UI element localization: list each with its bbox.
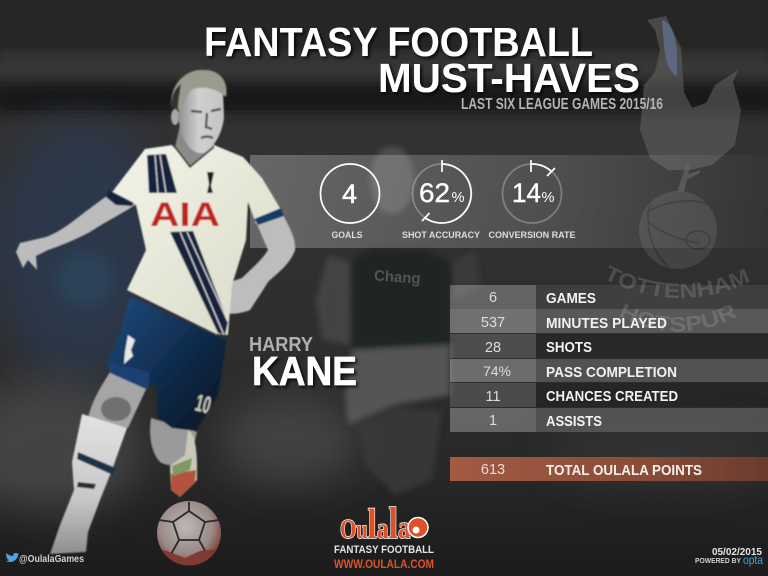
football <box>157 501 221 566</box>
player name <box>249 333 357 394</box>
left arm <box>16 192 135 270</box>
row: games: GAMES <box>546 291 596 307</box>
neck <box>175 125 215 167</box>
row: minutes played <box>450 309 768 333</box>
row: pass completion: PASS COMPLETION <box>546 365 677 381</box>
row: total oulala points: TOTAL OULALA POINTS <box>546 463 702 479</box>
row: chances created: 11 <box>485 389 501 405</box>
row: chances created <box>450 383 768 407</box>
player figure <box>16 70 295 554</box>
stat: goals: 4 <box>342 179 357 209</box>
stat: shot accuracy: SHOT ACCURACY <box>402 230 481 241</box>
ghost shirt sponsor text: Chang <box>373 267 421 288</box>
website url: WWW.OULALA.COM <box>334 559 434 571</box>
row: minutes played: 537 <box>481 315 505 331</box>
stat: shot accuracy <box>402 160 481 241</box>
stat: goals <box>320 164 380 241</box>
sleeve cuffs <box>106 190 134 206</box>
ghost arms <box>316 255 350 345</box>
ghost shorts <box>345 345 450 425</box>
hair shadow <box>171 84 181 110</box>
row: assists <box>450 408 768 432</box>
ghost legs <box>358 408 442 495</box>
date and credit: 05/02/2015 <box>712 547 762 558</box>
title: MUST-HAVES <box>378 55 640 101</box>
row: pass completion <box>450 359 768 382</box>
shorts number: 10 <box>193 390 214 419</box>
twitter handle <box>6 553 84 565</box>
stat: shot accuracy: 62 <box>419 178 450 208</box>
AIA sponsor: AIA <box>150 196 220 234</box>
logo tagline: FANTASY FOOTBALL <box>334 544 434 556</box>
club crest: cockerel and ball watermark <box>608 16 750 332</box>
shirt <box>110 145 283 335</box>
player name: KANE <box>252 348 357 394</box>
face features <box>191 109 221 138</box>
twitter handle: @OulalaGames <box>19 554 84 565</box>
stats table <box>450 285 768 481</box>
stat: conversion rate <box>488 160 576 241</box>
stat: conversion rate: % <box>542 189 554 206</box>
date and credit: POWERED BY <box>695 558 741 565</box>
row: minutes played: MINUTES PLAYED <box>546 316 667 332</box>
row: games <box>450 285 768 309</box>
near leg <box>88 372 148 428</box>
sash stripes <box>155 155 228 335</box>
stat: goals: GOALS <box>332 230 362 241</box>
row: total oulala points <box>450 457 768 481</box>
title <box>204 19 640 101</box>
stat: conversion rate: 14 <box>512 178 541 208</box>
stat: shot accuracy: % <box>452 189 464 206</box>
shirt sash <box>147 154 177 193</box>
player name: HARRY <box>249 333 313 356</box>
hair <box>171 70 227 110</box>
collar line <box>175 147 214 167</box>
stat: conversion rate: CONVERSION RATE <box>488 230 576 241</box>
ghost background player <box>316 146 480 495</box>
row: shots: 28 <box>485 340 501 356</box>
shirt crest <box>207 172 214 193</box>
ghost shirt <box>350 248 452 350</box>
row: total oulala points: 613 <box>481 462 505 478</box>
far leg and boot <box>150 418 197 465</box>
row: chances created: CHANCES CREATED <box>546 389 678 405</box>
row: shots <box>450 334 768 358</box>
oulala logo: Oulala <box>340 499 410 548</box>
stats band <box>250 155 768 248</box>
right arm <box>213 215 295 314</box>
crest lettering: TOTTENHAM <box>608 266 750 298</box>
shorts crest <box>124 335 135 364</box>
shorts <box>107 297 226 431</box>
head <box>178 85 224 153</box>
row: assists: ASSISTS <box>546 414 602 430</box>
ear <box>171 109 179 125</box>
date and credit: opta <box>743 553 763 567</box>
row: games: 6 <box>489 290 497 306</box>
club crest: cockerel and ball watermark: HOTSPUR <box>620 304 738 332</box>
title: FANTASY FOOTBALL <box>204 19 593 65</box>
row: assists: 1 <box>489 413 497 429</box>
date and credit <box>695 547 763 567</box>
row: shots: SHOTS <box>546 340 592 356</box>
subtitle: LAST SIX LEAGUE GAMES 2015/16 <box>461 96 663 113</box>
row: pass completion: 74% <box>483 363 511 379</box>
